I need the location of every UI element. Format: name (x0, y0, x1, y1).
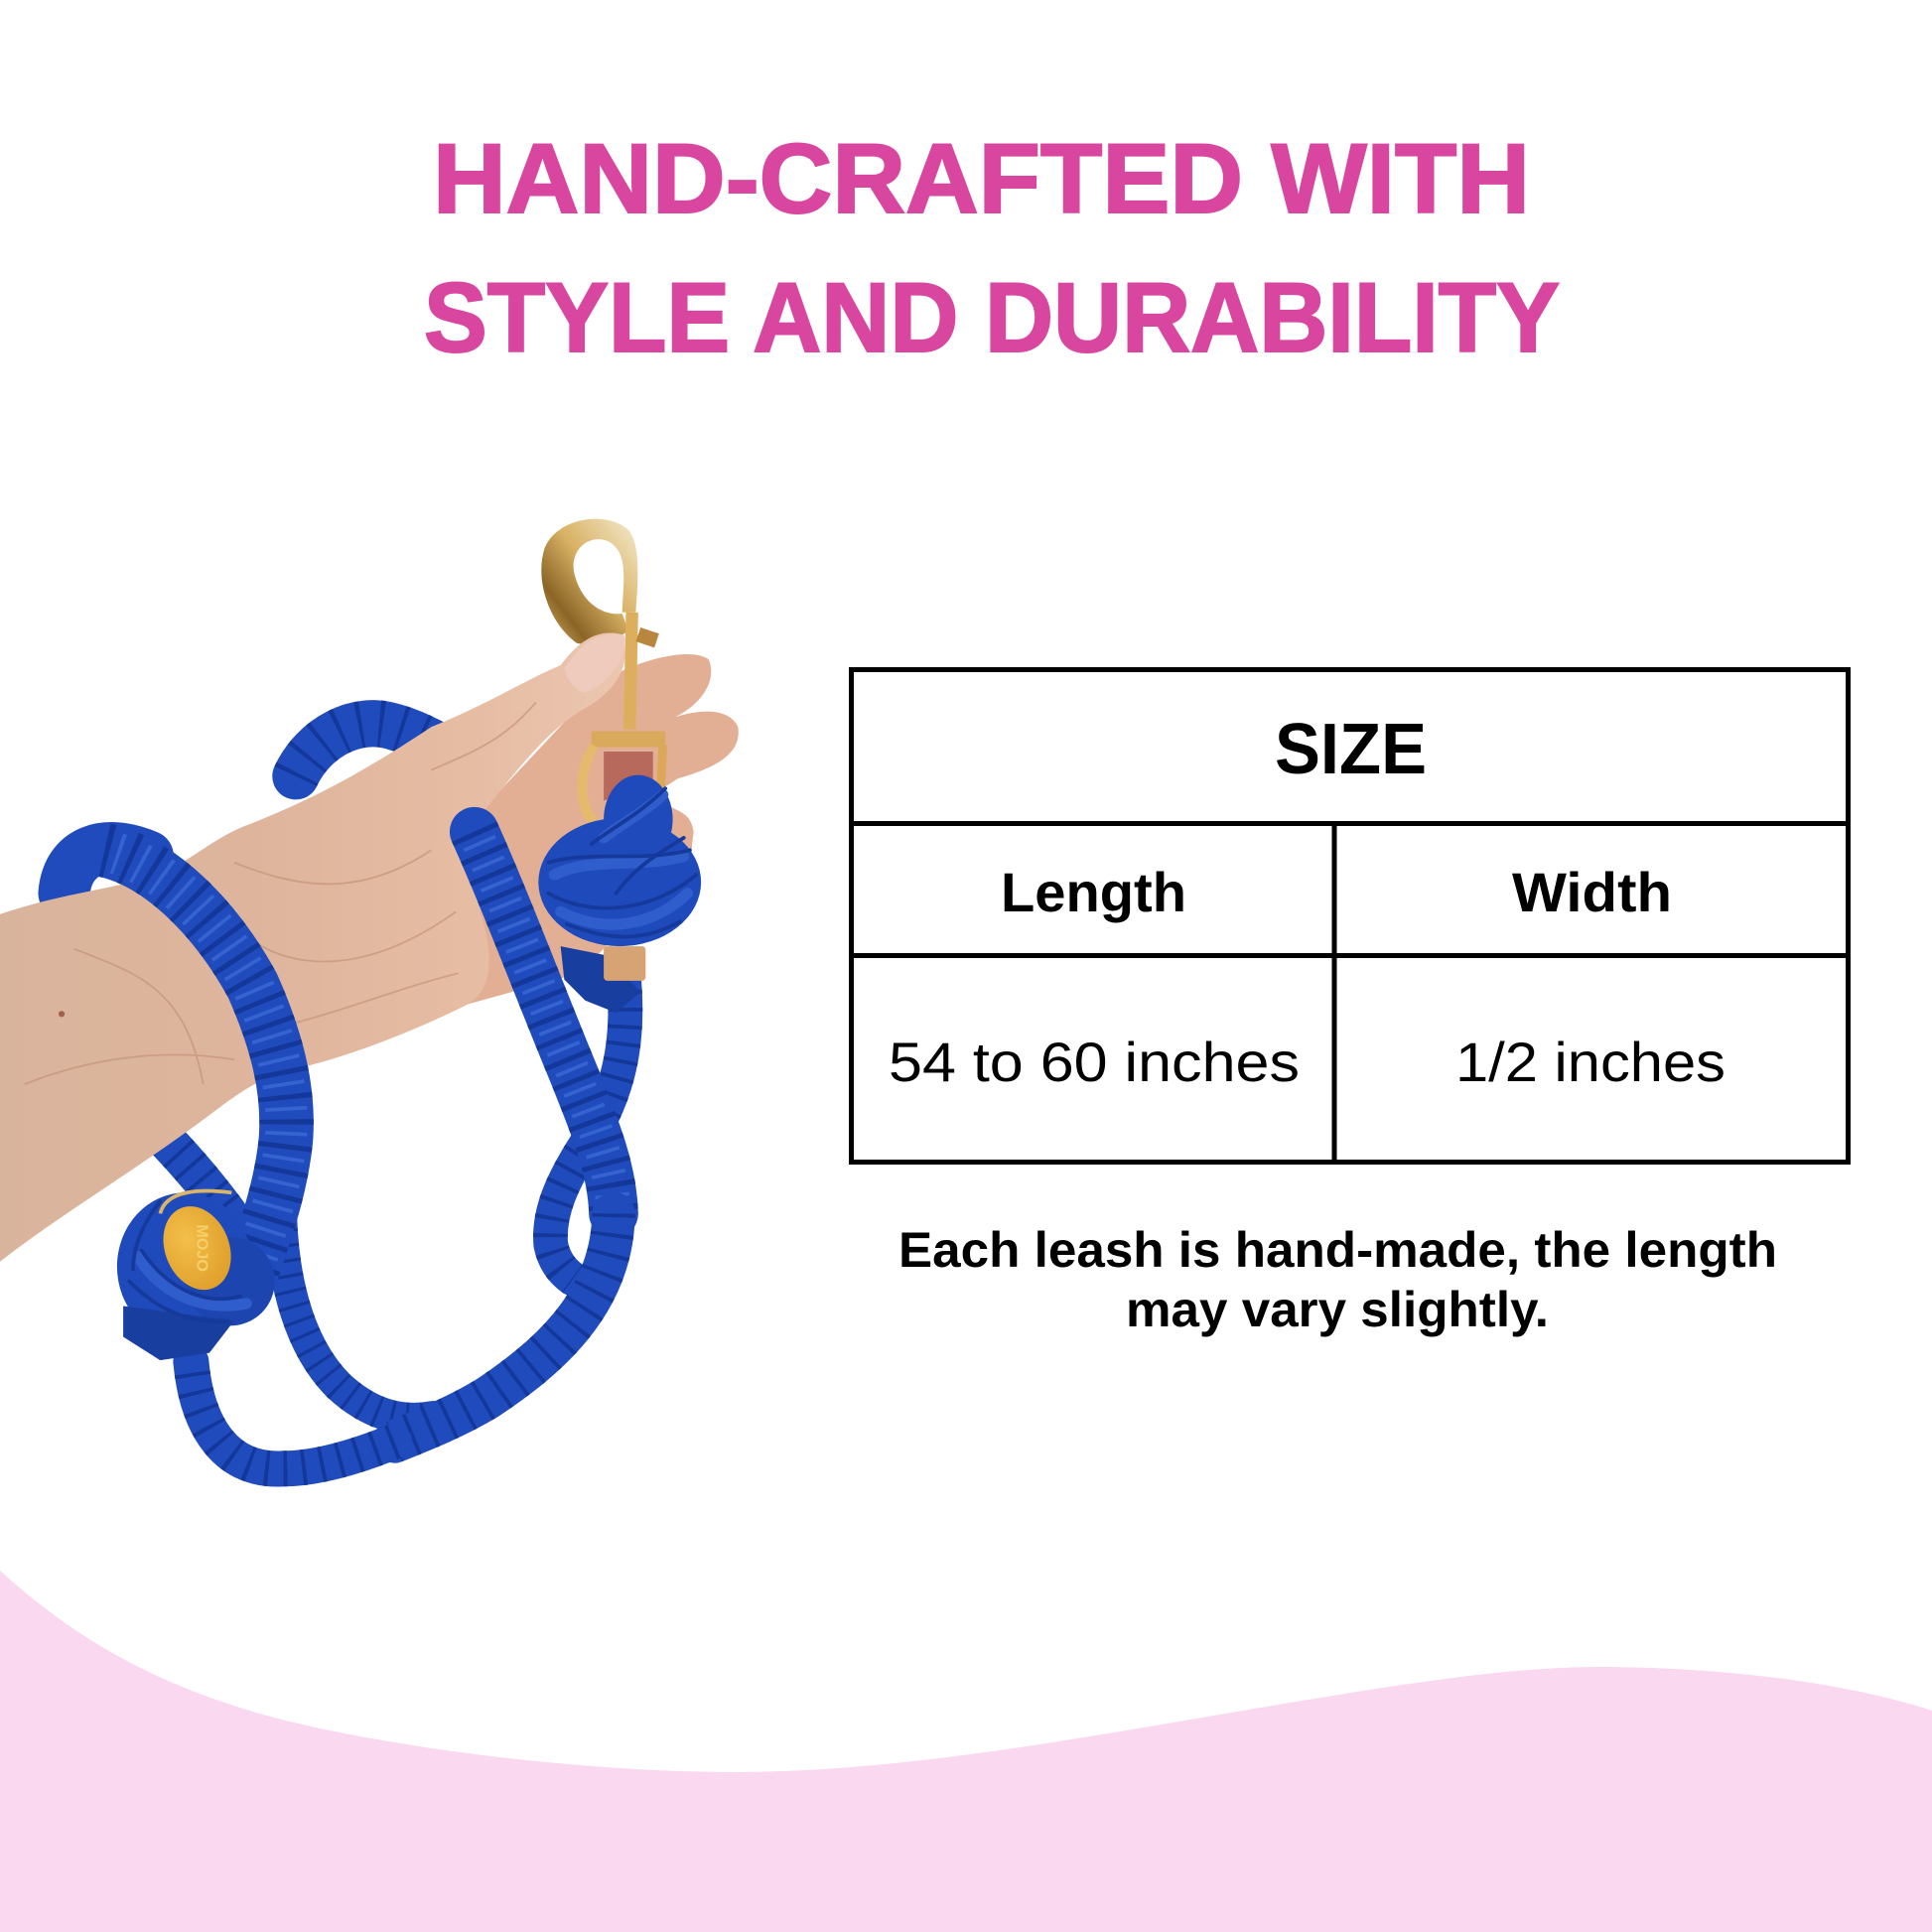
photo: hand holding blue rope leash (0, 519, 739, 1468)
rope loop behind thumb (296, 724, 441, 776)
thumb nail (564, 633, 625, 692)
note line 2: may vary slightly. (1126, 1282, 1549, 1337)
column divider (1332, 824, 1336, 1163)
upper tassel (561, 946, 640, 1013)
cork wrap (604, 946, 645, 981)
upper knot with wrap and tassel (538, 775, 701, 1013)
table outline (852, 669, 1849, 1162)
column label: length: Length (1001, 861, 1186, 923)
header divider (851, 821, 1849, 826)
long front rope from palm to bottom (191, 832, 614, 1468)
rope loop behind wrist (65, 848, 148, 894)
hook (541, 519, 637, 644)
main thick rope over wrist (104, 850, 287, 1269)
pink wave background (0, 1571, 1932, 1932)
shaft (629, 613, 632, 730)
title (424, 123, 1560, 372)
far rope strands (281, 973, 625, 1419)
title line 2: STYLE AND DURABILITY (424, 262, 1560, 372)
gold tag (151, 1196, 243, 1300)
lower tassel (123, 1306, 234, 1360)
tag text: MOJO (194, 1224, 211, 1272)
mole on forearm (59, 1011, 65, 1017)
size table (851, 669, 1849, 1163)
swivel (592, 733, 665, 746)
palm creases (25, 702, 536, 1084)
note text (898, 1222, 1777, 1337)
tag ring (160, 1190, 231, 1213)
back fingers (456, 654, 739, 1004)
value: length: 54 to 60 inches (889, 1031, 1300, 1093)
title line 1: HAND-CRAFTED WITH (433, 123, 1530, 233)
table header: size: SIZE (1275, 710, 1427, 789)
lower knot with tassel (117, 1190, 275, 1360)
note line 1: Each leash is hand-made, the length (898, 1222, 1777, 1278)
row divider (851, 953, 1849, 958)
short rope to lower knot (142, 1115, 228, 1213)
column label: width: Width (1512, 861, 1672, 923)
value: width: 1/2 inches (1455, 1031, 1725, 1093)
hand and forearm (0, 633, 625, 1262)
gold clasp (541, 519, 665, 835)
